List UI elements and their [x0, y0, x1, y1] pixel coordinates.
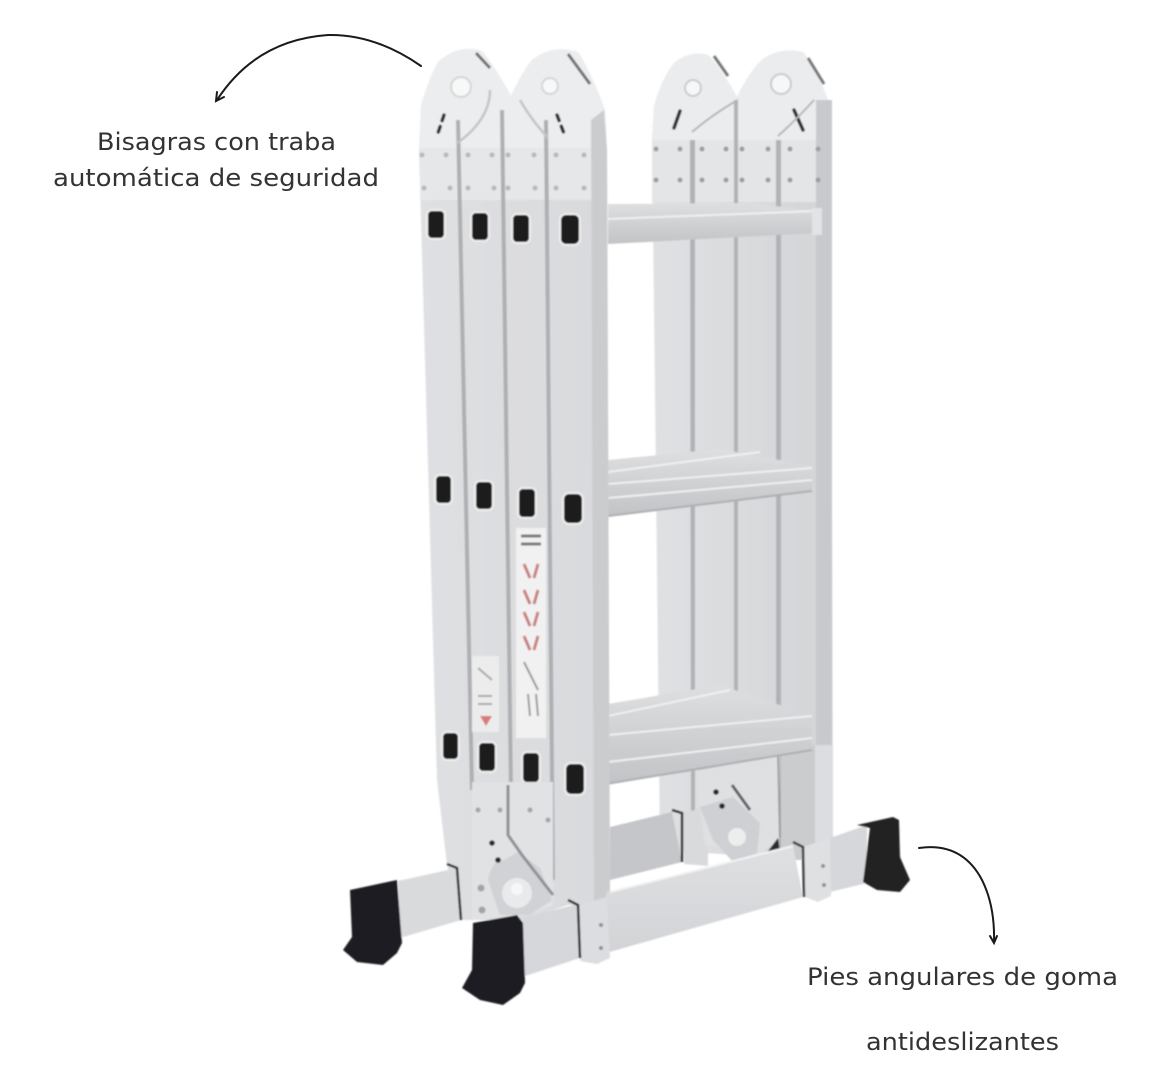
arrow: to hinge label: [216, 35, 421, 101]
front hinge plates: [419, 49, 607, 150]
arrow: to feet label: [919, 847, 997, 943]
back ladder section: [652, 50, 833, 860]
front cross bar: [606, 846, 803, 953]
middle rung: [608, 449, 812, 516]
hinge label text: automática de seguridad: [53, 164, 379, 192]
front foot tube: [522, 904, 580, 977]
product photo: folding aluminium ladder: [343, 49, 910, 1005]
rung holes: [427, 210, 585, 795]
left foot tube: [398, 868, 461, 938]
feet label text: [807, 963, 1118, 1056]
right foot tube: [830, 825, 867, 892]
feet label text: Pies angulares de goma: [807, 963, 1118, 991]
right foot bracket: [803, 838, 831, 902]
back hinge pivots: [654, 56, 824, 182]
lower back hinge plate: [695, 748, 780, 862]
top hinge pivots and locks: [420, 53, 590, 190]
instruction stickers: [472, 528, 546, 738]
front ladder section: [419, 49, 610, 920]
hinge label text: Bisagras con traba: [97, 128, 336, 156]
hinge label text: [53, 128, 379, 192]
lower right rail of back section: [781, 745, 833, 860]
lower rung: [606, 685, 812, 784]
rear cross bar: [610, 808, 708, 880]
lower front hinge: [472, 782, 553, 920]
feet label text: antideslizantes: [866, 1028, 1059, 1056]
top rung: [608, 203, 822, 244]
callout: rubber feet: [807, 847, 1118, 1056]
callout: hinges: [53, 35, 421, 192]
front foot bracket: [578, 897, 610, 964]
black rubber foot: front: [462, 915, 525, 1005]
vertical panel grooves: [458, 110, 553, 880]
black rubber foot: left: [343, 880, 402, 965]
black rubber foot: right: [857, 817, 910, 892]
